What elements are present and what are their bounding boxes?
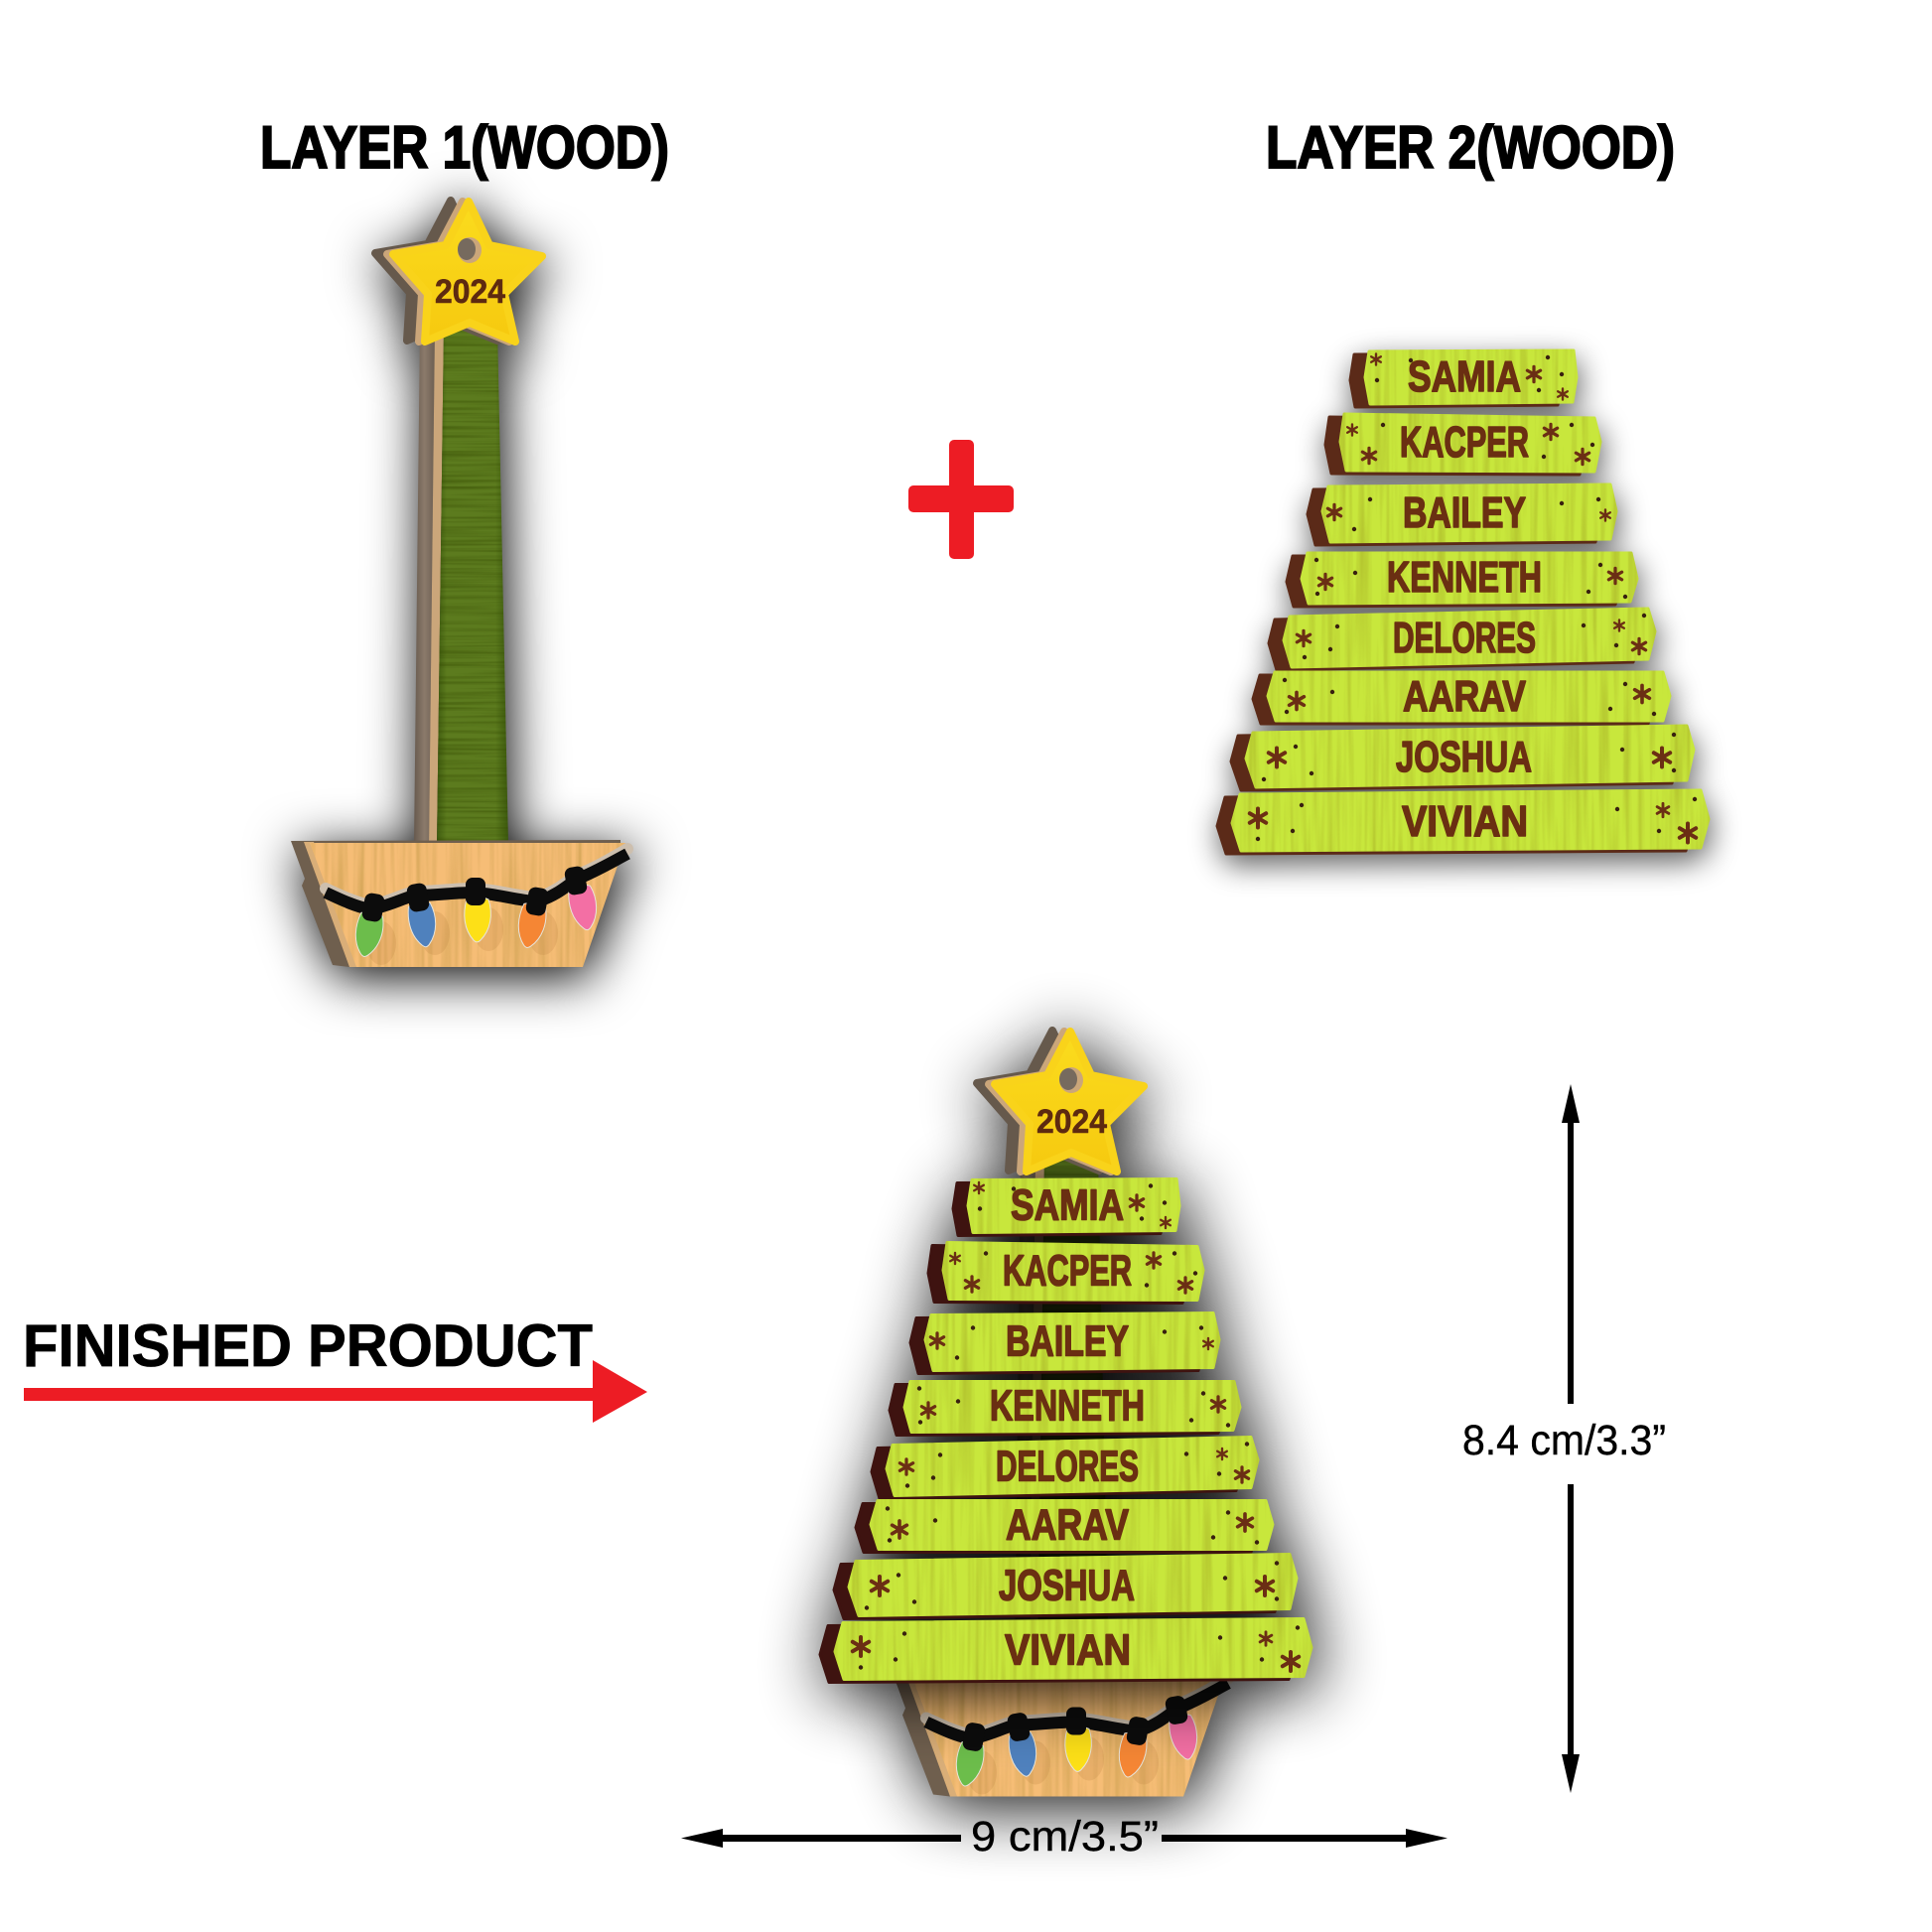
plank names: BAILEY xyxy=(1403,488,1526,537)
plank names: DELORES xyxy=(1393,614,1536,662)
stacked planks xyxy=(820,1179,1311,1682)
plank names: KENNETH xyxy=(1387,553,1542,602)
label: height: 8.4 cm/3.3” xyxy=(1462,1417,1666,1464)
arrow: width dimension xyxy=(681,1829,1448,1848)
plank names: JOSHUA xyxy=(1396,733,1532,781)
icon: star with year xyxy=(375,201,542,342)
star with year xyxy=(977,1031,1144,1172)
arrow: finished product xyxy=(24,1360,647,1423)
label: finished product: FINISHED PRODUCT xyxy=(23,1312,593,1379)
panel: layer 1 wood piece xyxy=(291,201,627,967)
finished plank names: JOSHUA xyxy=(999,1561,1135,1610)
finished plank names: DELORES xyxy=(996,1442,1139,1491)
finished plank names: SAMIA xyxy=(1011,1181,1124,1229)
panel: layer 2 name planks xyxy=(1217,350,1709,854)
finished plank names xyxy=(990,1181,1145,1674)
icon: star with year: 2024 xyxy=(435,273,505,311)
arrow: height dimension xyxy=(1562,1084,1580,1793)
heading: layer 2: LAYER 2(WOOD) xyxy=(1266,114,1675,181)
icon: red plus xyxy=(908,440,1014,559)
plank names: KACPER xyxy=(1400,418,1529,467)
finished plank names: KENNETH xyxy=(990,1382,1145,1430)
stem and pot with string lights xyxy=(291,328,627,967)
panel: finished ornament xyxy=(820,1031,1311,1797)
finished plank names: BAILEY xyxy=(1006,1316,1129,1366)
plank names: SAMIA xyxy=(1408,352,1521,401)
heading: layer 1: LAYER 1(WOOD) xyxy=(260,114,669,181)
plank names: AARAV xyxy=(1403,672,1527,721)
finished plank names: AARAV xyxy=(1006,1501,1130,1549)
plank names: VIVIAN xyxy=(1402,797,1528,846)
star with year: 2024 xyxy=(1036,1103,1107,1141)
label: width: 9 cm/3.5” xyxy=(971,1813,1159,1861)
finished plank names: VIVIAN xyxy=(1005,1626,1131,1674)
plank names xyxy=(1387,352,1542,846)
finished plank names: KACPER xyxy=(1003,1247,1132,1295)
